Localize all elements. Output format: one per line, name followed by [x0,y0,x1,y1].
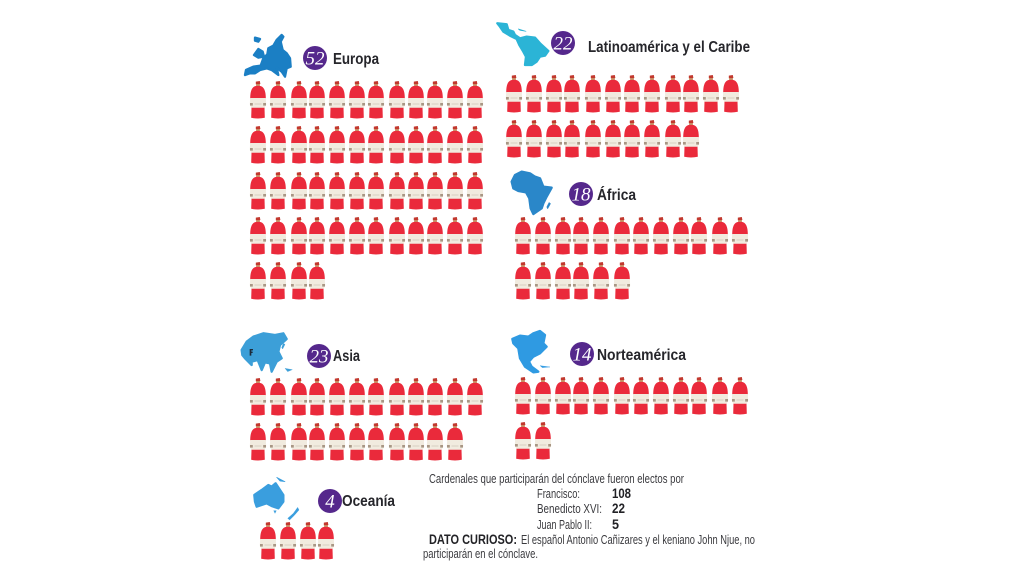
icon: map of Oceania [254,477,299,520]
row: Benedicto XVI: Benedicto XVI: [537,501,602,516]
panel: Oceanía [254,477,395,560]
cardinals: 52 [250,81,483,300]
row: Francisco: 108 [612,486,631,501]
count badge: 18 [569,182,593,206]
count badge: 52 [303,46,327,70]
icon: map of Europe [245,35,291,77]
row: Juan Pablo II: Juan Pablo II: [537,517,592,532]
count badge: 4: 4 [325,492,335,512]
cardinals: 22 [506,75,739,158]
panel: Asia [242,333,483,460]
text block: electors and curious fact [423,471,755,561]
curious fact: DATO CURIOSO: [429,532,517,547]
heading: Norteamérica: Norteamérica [597,347,686,364]
heading: Latinoamérica y el Caribe: Latinoamérica y el Caribe [588,39,750,56]
curious fact: El español Antonio Cañizares y el keniano John Njue, no [521,532,755,547]
count badge: 23 [307,344,331,368]
count badge: 14 [570,342,594,366]
row: Benedicto XVI: 22 [612,501,625,516]
heading: Europa: Europa [333,51,379,68]
count badge: 18: 18 [572,184,591,206]
panel: África [512,172,748,300]
cardinals: 14 [515,377,748,460]
curious fact [423,532,755,561]
cardinals: 23 [250,378,483,460]
icon: map of Africa [512,172,552,214]
cardinals: 4 [260,522,334,560]
heading: África: África [597,185,636,204]
panel: Europa [245,35,483,300]
icon: map of Latin America [497,23,548,65]
curious fact: participarán en el cónclave. [423,546,538,561]
count badge: 4 [318,489,342,513]
cardinals: 18 [515,217,748,300]
count badge: 23: 23 [310,346,328,368]
icon: map of Asia [242,333,292,372]
count badge: 52: 52 [306,48,325,70]
row: Francisco [537,486,631,501]
row: Francisco: Francisco: [537,486,580,501]
count badge: 22 [551,31,575,55]
icon: map of North America [512,331,550,372]
row: Juan Pablo II: 5 [612,517,619,532]
count badge: 22: 22 [554,34,573,54]
panel: Latinoamérica y el Caribe [497,23,750,157]
intro line: Cardenales que participarán del cónclave fueron electos por [429,471,684,486]
count badge: 14: 14 [572,344,592,366]
heading: Asia: Asia [333,348,360,365]
heading: Oceanía: Oceanía [342,493,395,510]
panel: Norteamérica [512,331,748,460]
